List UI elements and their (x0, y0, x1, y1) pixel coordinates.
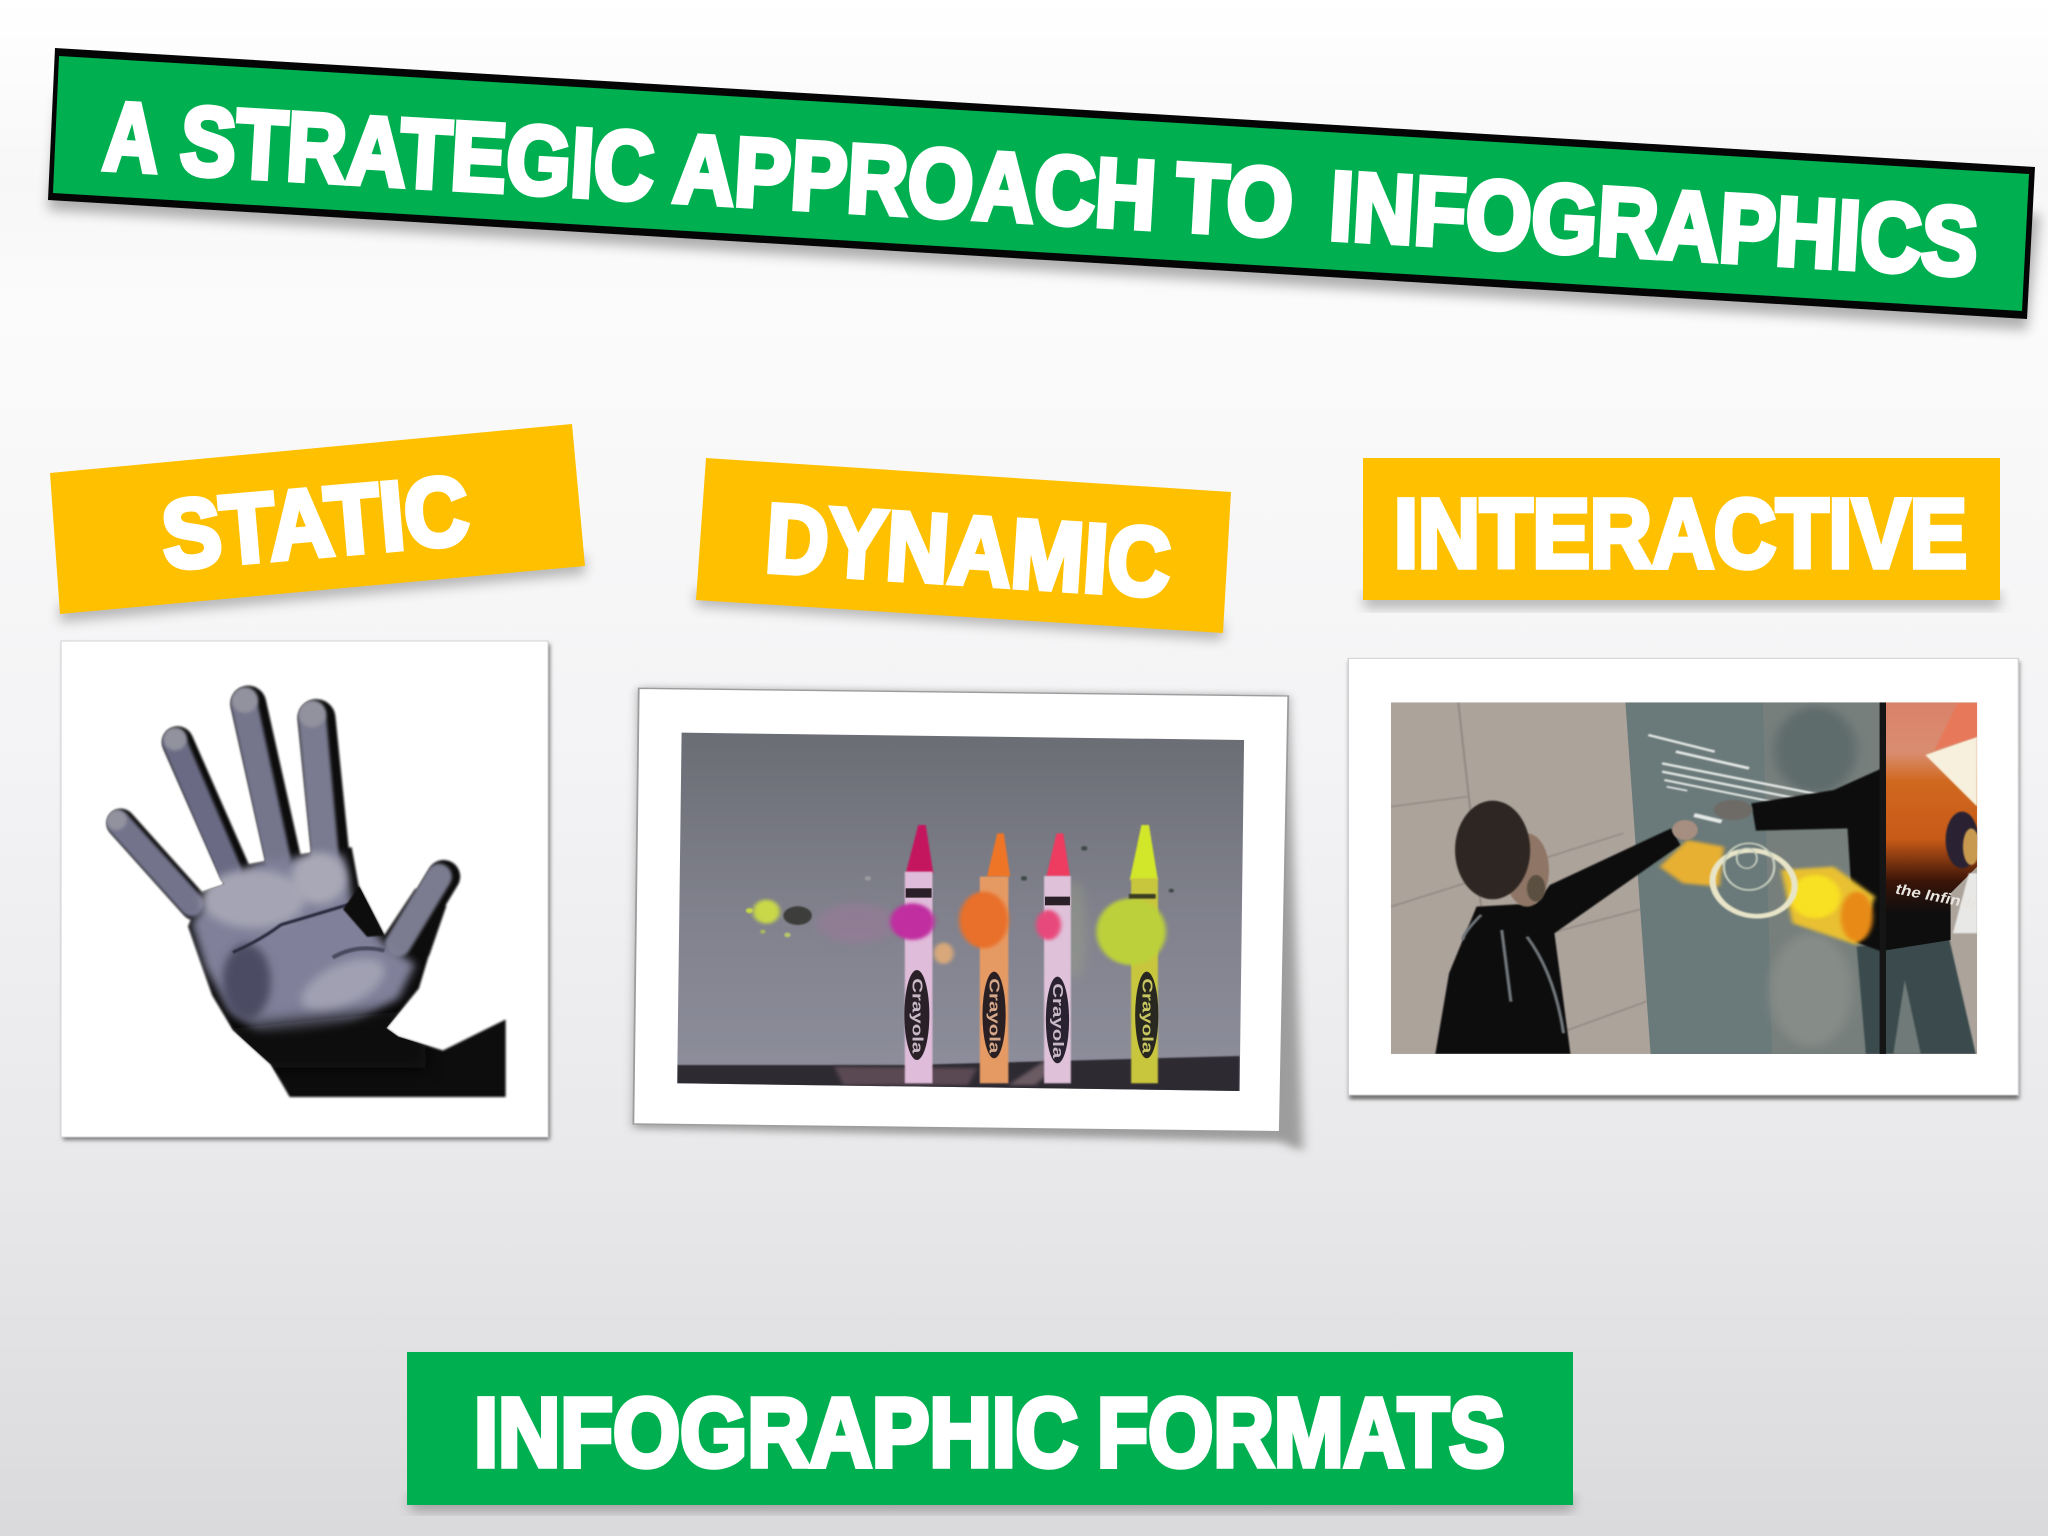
card frame (633, 688, 1303, 1152)
right person jeans (1857, 935, 1976, 1054)
hand image (106, 687, 506, 1097)
footer text: FORMATS (1097, 1378, 1505, 1487)
title text: A (101, 81, 162, 193)
crayon 4: Crayola (1139, 978, 1156, 1054)
crayon 1: Crayola (909, 978, 926, 1054)
title banner (48, 48, 2040, 330)
wall photo: the Infiniti (1893, 880, 1979, 912)
crayon 4 (1096, 825, 1166, 1083)
left man (1435, 801, 1698, 1054)
crayon photo (677, 733, 1244, 1093)
static text: STATIC (157, 455, 473, 590)
title text: TO (1173, 142, 1296, 258)
crayon 3: Crayola (1050, 983, 1067, 1059)
right person poster (1884, 702, 1977, 951)
projected text (1648, 735, 1829, 822)
title text: APPROACH (671, 114, 1159, 250)
crayon 2: Crayola (986, 978, 1003, 1054)
title text: STRATEGIC (178, 86, 657, 221)
footer text: INFOGRAPHIC (474, 1378, 1078, 1487)
projected rings (1708, 842, 1799, 920)
label: static (50, 424, 585, 622)
dynamic text: DYNAMIC (763, 483, 1174, 617)
footer banner (407, 1352, 1573, 1511)
crayon 3 (1036, 833, 1071, 1083)
photo card: interactive wall (1348, 658, 2019, 1100)
photo card: hand (61, 641, 550, 1140)
wall photo (1391, 702, 1979, 1054)
title text (101, 81, 1981, 297)
crayon 1 (890, 825, 935, 1083)
photo card: crayons (633, 688, 1303, 1152)
interactive text: INTERACTIVE (1394, 479, 1967, 588)
flames (1660, 840, 1875, 945)
label: interactive (1363, 458, 2000, 608)
footer text (474, 1378, 1505, 1487)
crayon 2 (959, 833, 1010, 1083)
label: dynamic (696, 458, 1231, 640)
projectile (746, 846, 1174, 980)
right person arm (1751, 768, 1882, 952)
